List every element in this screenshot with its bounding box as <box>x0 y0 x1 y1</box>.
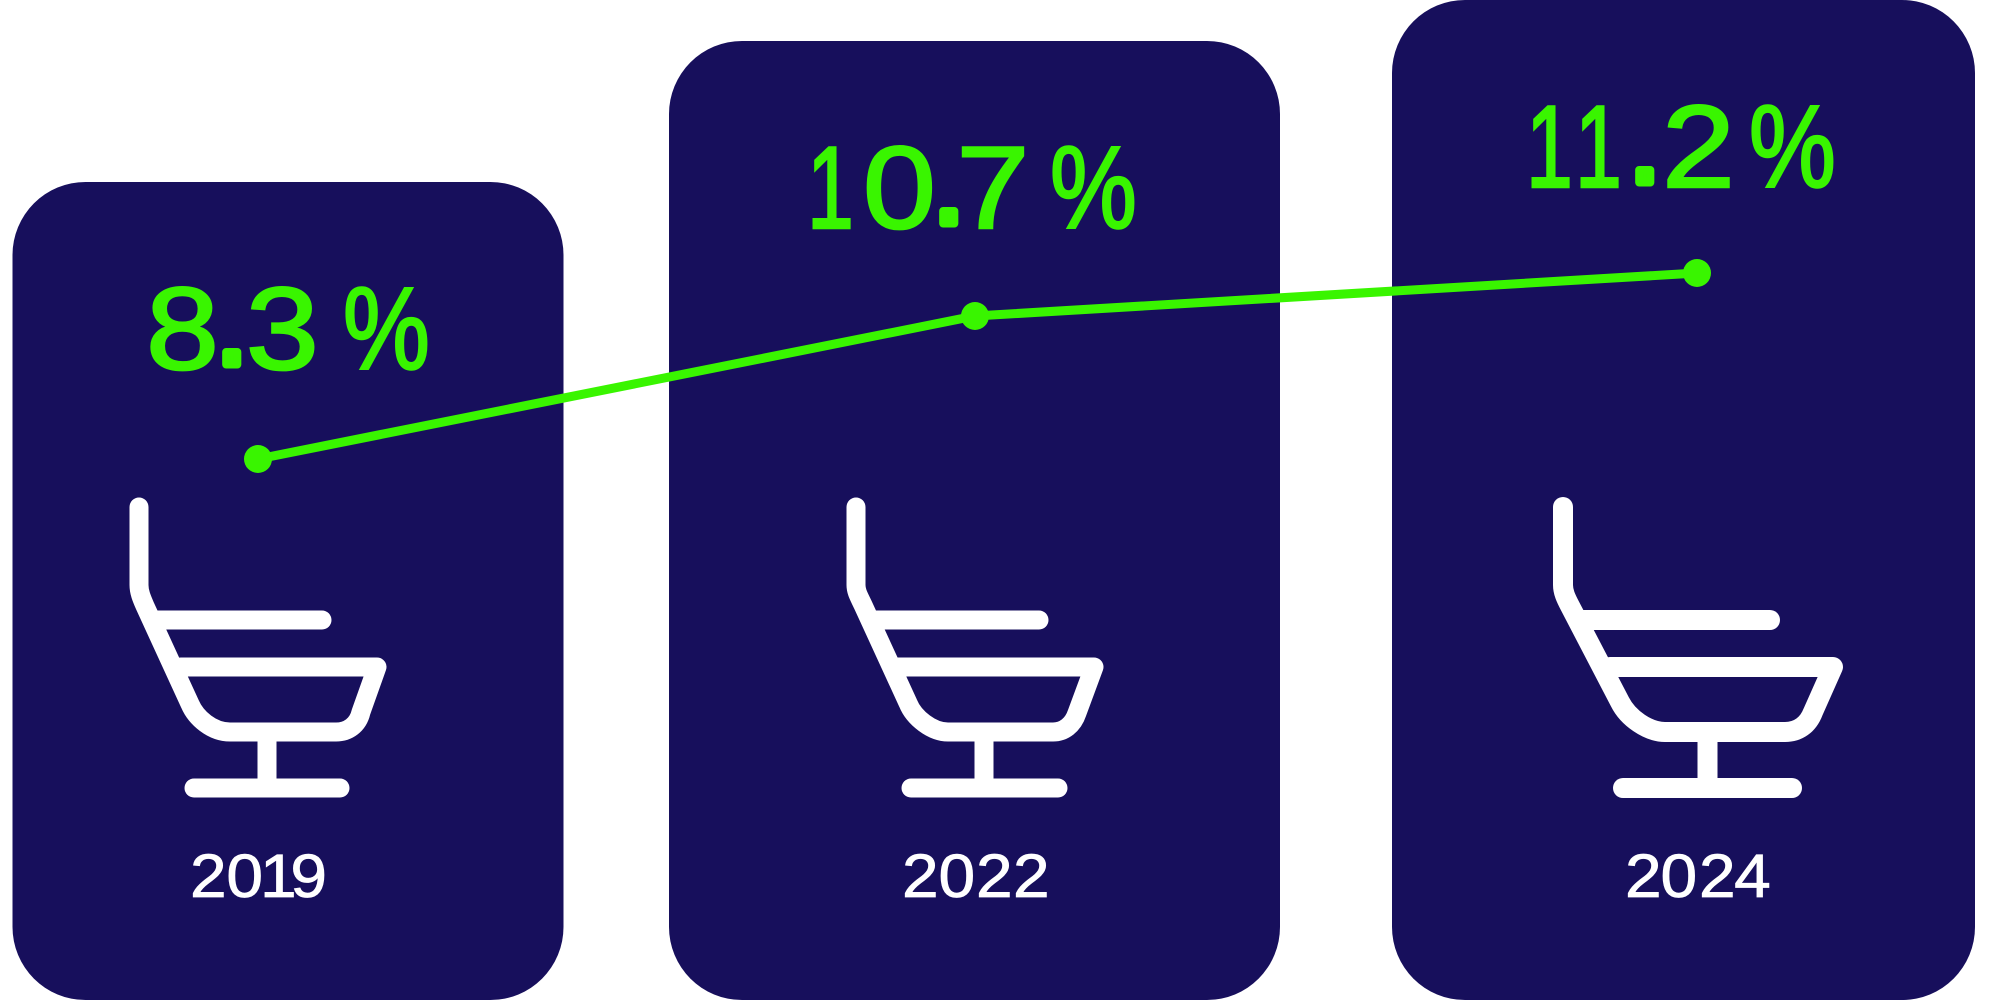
value: 11.2 %: 1 <box>1575 81 1622 212</box>
trend line with markers <box>244 259 1711 473</box>
value: 10.7 %: 0 <box>863 123 936 253</box>
panel: 2019 <box>12 182 564 1000</box>
year label: 2022: 2022 <box>902 843 1050 910</box>
year label: 2024: 2024 <box>1625 843 1771 910</box>
value: 8.3 %: % <box>343 263 430 394</box>
panel: 2024 <box>1392 0 1975 1000</box>
value: 8.3 %: . <box>216 258 248 390</box>
value: 8.3 %: 83 <box>146 264 319 394</box>
year label: 2019: 2019 <box>190 843 327 910</box>
value: 11.2 %: . <box>1628 76 1661 208</box>
value: 10.7 %: % <box>1050 122 1137 253</box>
value: 8.3 % <box>146 258 430 394</box>
value: 10.7 %: . <box>932 118 965 248</box>
icon: seat 2024 <box>1563 507 1833 788</box>
value: 11.2 % <box>1526 76 1836 212</box>
panel: 2022 <box>669 41 1280 1000</box>
icon: seat 2022 <box>856 507 1094 788</box>
value: 11.2 %: % <box>1749 81 1836 212</box>
value: 11.2 %: 1 <box>1526 81 1573 212</box>
value: 10.7 %: 7 <box>956 123 1029 253</box>
icon: seat 2019 <box>139 507 377 788</box>
value: 10.7 % <box>807 118 1137 253</box>
value: 11.2 %: 2 <box>1662 82 1735 212</box>
value: 10.7 %: 1 <box>807 122 854 253</box>
